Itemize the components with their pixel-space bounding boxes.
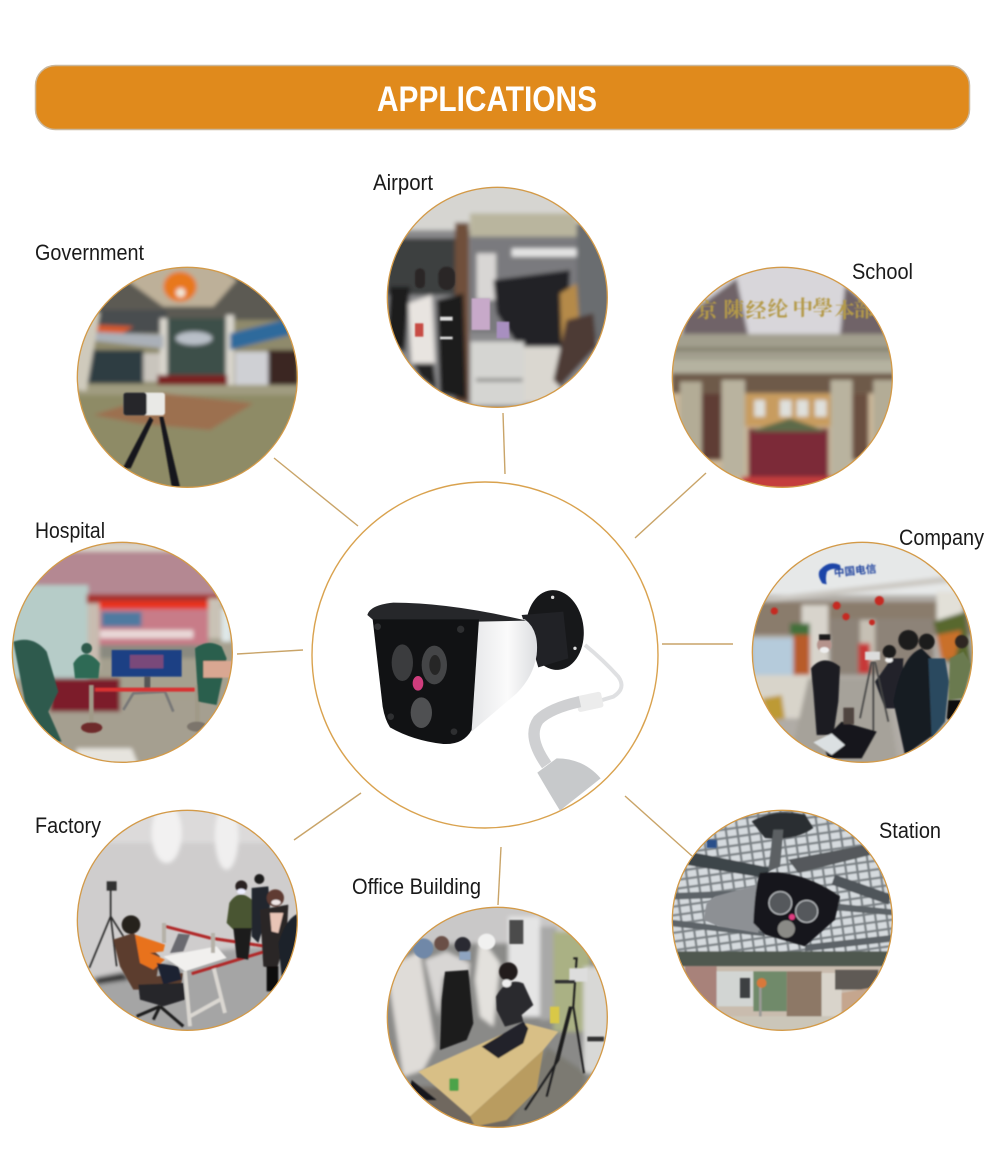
photo: School gate: 纶: [768, 298, 789, 321]
photo: Station ceiling camera: [672, 810, 893, 1031]
photo: School gate: 陳: [723, 299, 744, 322]
photo: School gate: 经: [746, 299, 768, 322]
connector lines: [237, 413, 733, 905]
photo: School gate: 京: [697, 298, 718, 322]
photo: Airport screening: [386, 186, 608, 408]
photo: Factory checkpoint: [76, 810, 298, 1031]
photo: School gate: [672, 266, 893, 488]
photo: School gate: 學: [811, 297, 833, 320]
label: Government: Government: [35, 240, 144, 265]
photo: Company lobby: 中国电信: [833, 562, 877, 580]
photo: School gate: 本: [834, 299, 855, 322]
central circle with camera: [312, 482, 658, 828]
photo: Hospital hall: [12, 542, 233, 763]
icon: bullet camera: [367, 587, 622, 811]
title: APPLICATIONS: [377, 80, 597, 119]
label: Factory: Factory: [35, 813, 101, 838]
label: Hospital: Hospital: [35, 518, 105, 543]
label: Office Building: Office Building: [352, 874, 481, 899]
photo: Company lobby: [745, 535, 985, 775]
photo: School gate: 中: [792, 297, 813, 320]
label: Station: Station: [879, 818, 941, 843]
photo: School gate: 部: [853, 299, 874, 322]
label: School: School: [852, 259, 913, 284]
label: Company: Company: [899, 525, 984, 550]
label: Airport: Airport: [373, 170, 433, 195]
header banner: [36, 66, 970, 130]
photo: Government lobby: [76, 266, 298, 488]
photo: Office reception: [386, 906, 608, 1128]
